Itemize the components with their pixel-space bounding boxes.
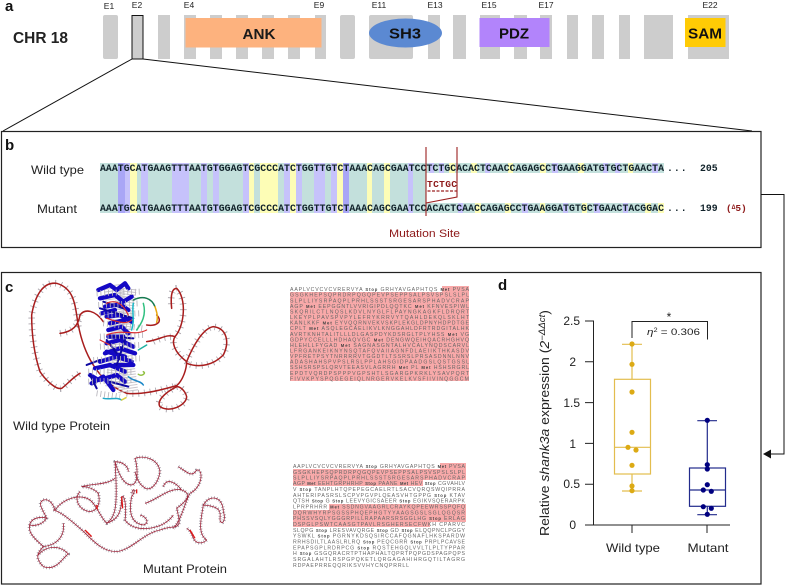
mutant protein sequence: YSWKL Stop PGRNYKDSQSIRCCAFQGNAFLHKSPARDW bbox=[293, 534, 465, 540]
significance bracket bbox=[632, 310, 708, 340]
mutant protein structure bbox=[29, 457, 224, 568]
panel d: box plot of shank3a expression bbox=[498, 277, 730, 555]
y axis tick labels bbox=[563, 314, 580, 532]
x axis label mutant: Mutant bbox=[688, 541, 729, 555]
y axis tick labels: 1 bbox=[569, 437, 576, 451]
wild type sequence: AAATGCATGAAGTTTAATGTGGAGTCGCCCATCTGGTTGTCTAAACAGCGAATCCTCTGCACACTCAACCAGAGCCTGAAGGATGTGCTGAACTA bbox=[100, 163, 664, 174]
x axis label wild type: Wild type bbox=[606, 541, 660, 555]
significance bracket: = 0.306 bbox=[658, 327, 700, 338]
mutant sequence: AAATGCATGAAGTTTAATGTGGAGTCGCCCATCTGGTTGTCTAAACAGCGAATCCACACTCAACCAGAGCCTGAAGGATGTGCTGAACTACGGAC bbox=[100, 203, 664, 214]
mutant trailing dots and count: 199 bbox=[700, 203, 718, 214]
mutant protein sequence: PHSSVSQLYGGGRPILLRAPAARSRSGGLHG Stop ERLAG bbox=[293, 516, 465, 522]
exon labels: E9 bbox=[314, 0, 324, 10]
y axis tick labels: 2.5 bbox=[563, 314, 580, 328]
mutant protein sequence: H Stop GSGQRACRTPTHAPHALTQPRTPQPGDSPAGPQPS bbox=[293, 551, 466, 557]
mutation site marker bbox=[426, 147, 457, 216]
exon labels: E1 bbox=[104, 1, 114, 11]
PDZ domain: PDZ bbox=[499, 26, 529, 42]
ANK domain bbox=[186, 18, 322, 48]
mutant protein sequence: AHTERIPASRSLSCPVPGVPLQEASVHTGPPG Stop KTAV bbox=[293, 493, 466, 499]
mutant protein sequence: RDPAEPRREQQRIKSVVHYCNQPRRLL bbox=[293, 563, 409, 569]
mutant protein sequence: LPRPRHRR Met SSDNGVAAGRLCRAYKQPEEWRSSPQFQ bbox=[293, 504, 465, 510]
wild type protein label: Wild type Protein bbox=[13, 419, 110, 433]
exon blocks bbox=[103, 15, 729, 59]
panel letter c: c bbox=[5, 279, 13, 296]
PDZ domain bbox=[480, 18, 550, 47]
SH3 domain bbox=[369, 18, 442, 48]
wild type protein sequence: SKQRILCTLNQSLKDVLNYGLFLPAYNGKAGKFLDRQRT bbox=[290, 309, 470, 315]
wild type protein sequence: SLPLLIYSRPAQPLPRHLSSSTSRGESARSPHADVCRAP bbox=[290, 298, 470, 304]
panel a: chromosome 18 gene schematic bbox=[5, 0, 729, 59]
mutant protein sequence: DSPGLPSWTCAASGTPAVLRSGHERSECFWKH CPARVC bbox=[293, 522, 465, 528]
deleted bases: TCTGC bbox=[427, 179, 457, 190]
mutant protein sequence: QTSH Stop G Stop LEEVYGICSAEER Stop EGIKVSQERARPK bbox=[293, 499, 466, 505]
wild type protein sequence: KANLKKF Met EYVQQRNVEKVSKPLEKGLDPNYHDPDTGE bbox=[290, 321, 470, 327]
y axis tick labels: 0 bbox=[569, 518, 576, 532]
exon labels: E4 bbox=[184, 0, 194, 10]
axes and ticks bbox=[585, 320, 730, 533]
chromosome label: CHR 18 bbox=[13, 30, 68, 47]
SAM domain: SAM bbox=[688, 26, 722, 42]
wild type protein structure bbox=[32, 283, 227, 409]
mutant protein sequence: EPAPSGPLRDRPCG Stop RQSTEHGQLVVLTLPLTYPPAR bbox=[293, 545, 465, 551]
wild type protein sequence: HLEHLLFYGAD Met SAGNASGNTALHVCALYNQDSCARVL bbox=[290, 343, 469, 349]
wild type protein sequence: SSHSRSPSLQRVTEEASVLAGRRH Met PL Met HSHSRGRL bbox=[290, 365, 469, 371]
mutant protein label: Mutant Protein bbox=[143, 562, 227, 576]
wild type protein sequence: CPLT Met ASQLEGCAELIKVLKNGGAHLDFRTRDGITALHK bbox=[290, 326, 470, 332]
wild type box plot bbox=[614, 341, 650, 493]
wild type trailing dots and count bbox=[667, 163, 718, 174]
significance bracket: * bbox=[667, 310, 672, 324]
significance bracket: η bbox=[647, 327, 653, 338]
wild type protein sequence: AAPLVCVCVCVRERVYA Stop GRHYAVGAPHTQS Met PVSA bbox=[290, 287, 470, 293]
deletion annotation: ( bbox=[726, 203, 732, 214]
panel c: protein structures and sequences bbox=[5, 279, 470, 576]
wild type protein sequence: ADASHAHSPVPSLRSLPPLAHSGIDPAADGSLQSTGSSL bbox=[290, 360, 469, 366]
panel c and d frame bbox=[2, 272, 761, 584]
exon labels bbox=[104, 0, 718, 11]
wild type protein sequence: FIVVKPYSPQGEGEIQLNRGERVKELKVSFIIVINQGGCM bbox=[290, 376, 469, 382]
mutant protein sequence: SLPLLIYSRPAQPLPRHLSSSTSRGESARSPHADVCRAP bbox=[293, 476, 466, 482]
row label wild type: Wild type bbox=[31, 163, 84, 177]
mutant protein sequence: V Stop TANPLHTQPEPEGCAELRTLSACVQRQSWQIPRRA bbox=[293, 487, 466, 493]
SH3 domain: SH3 bbox=[389, 26, 421, 42]
y axis title: −ΔΔct bbox=[537, 314, 547, 341]
panel letter b: b bbox=[5, 137, 14, 154]
wild type protein sequence: VPFRETPSYTNRRRRVTGGDTLTSSRSLPRSASDNNLNNV bbox=[290, 354, 470, 360]
wild type protein sequence: AVRTKNHTALITLLLDLGASPDYKDSRGLTPLYHSS Met VG bbox=[290, 332, 469, 338]
highlighted exon E2 bbox=[132, 16, 143, 59]
mutant trailing dots and count bbox=[667, 203, 718, 214]
wild type trailing dots and count: 205 bbox=[700, 163, 718, 174]
y axis title: Relative shank3a expression (2 bbox=[537, 341, 552, 536]
deletion annotation: Δ bbox=[732, 204, 736, 211]
wild type trailing dots and count: ... bbox=[667, 163, 688, 174]
y axis tick labels: 0.5 bbox=[563, 477, 580, 491]
exon labels: E2 bbox=[132, 0, 142, 10]
mutant protein sequence: GSGKHEPSQPRDRPQGQPEVPSEPPSALPSVSPSLSLPL bbox=[293, 470, 465, 476]
wild type protein sequence: GSGKHEPSQPRDRPQGQPEVPSEPPSALPSVSPSLSLPL bbox=[290, 293, 469, 299]
wild type protein sequence: EPDTVQRDPSPPPVGPSHTLSGARGPKRKLYSAVPQRT bbox=[290, 371, 470, 377]
deletion annotation: 5) bbox=[735, 203, 747, 214]
wild type protein sequence: GDPYCCELLLHDHAQVGC Met DENGWQEIHQACRHGHVQ bbox=[290, 337, 469, 343]
mutant protein sequence: AGP Met EEHTGRPHRHP Stop PAANE Met HEV Stop CGVAHLV bbox=[293, 481, 466, 487]
exon labels: E22 bbox=[702, 0, 718, 10]
exon labels: E13 bbox=[427, 0, 443, 10]
y axis tick labels: 2 bbox=[569, 355, 576, 369]
mutant protein sequence: SRGALAHTLRSPGPQKETLQRGAGAHIHRGQTILTAGRG bbox=[293, 557, 465, 563]
connector arrow from panel b to panel d bbox=[761, 194, 784, 458]
wild type protein sequence: AGP Met EEPGGNTLVVRIGIPDLQQTKC Met KFNVESPIWL bbox=[290, 304, 469, 310]
mutant protein sequence bbox=[293, 463, 466, 569]
mutant protein sequence: SLQPG Stop LRESVAVQRGE Stop GD Stop ELQQPNCLPGGY bbox=[293, 528, 466, 534]
wild type protein sequence: LKEYPLPAVSPVPYLEFRYKRRVYTQAHLDEKQLSKLHT bbox=[290, 315, 470, 321]
y axis title: ) bbox=[537, 310, 552, 315]
significance bracket: 2 bbox=[653, 328, 658, 334]
mutation site label: Mutation Site bbox=[389, 228, 460, 240]
exon labels: E17 bbox=[538, 0, 554, 10]
panel b: sequence alignment bbox=[2, 132, 761, 248]
mutant protein sequence: AAPLVCVCVCVRERVYA Stop GRHYAVGAPHTQS Met PVSA bbox=[293, 464, 466, 470]
exon labels: E15 bbox=[481, 0, 497, 10]
conservation shading bbox=[100, 163, 664, 213]
mutant box plot bbox=[690, 418, 726, 517]
mutant protein sequence: RRHSDILTLAASLRLRQ Stop PEQCGRR Stop PRPLPCAVSE bbox=[293, 540, 466, 546]
wild type protein sequence: LFRGANKEIKNYNSQTAFQVAIIAGNFDLAEIIKTHKASDV bbox=[290, 348, 470, 354]
mutant trailing dots and count: ... bbox=[667, 203, 688, 214]
zoom lines from exon 2 to panel b bbox=[3, 59, 752, 131]
row label mutant: Mutant bbox=[37, 202, 78, 216]
mutant protein sequence: DQRWHYRPSGSSPHQEPHGTYYAAGSGSLSGLQGQSR bbox=[293, 510, 465, 516]
exon labels: E11 bbox=[372, 0, 387, 10]
y axis tick labels: 1.5 bbox=[563, 396, 580, 410]
panel b frame bbox=[2, 132, 761, 248]
SAM domain bbox=[685, 18, 726, 47]
panel letter d: d bbox=[498, 277, 507, 294]
wild type protein sequence bbox=[290, 286, 470, 382]
ANK domain: ANK bbox=[242, 27, 276, 43]
